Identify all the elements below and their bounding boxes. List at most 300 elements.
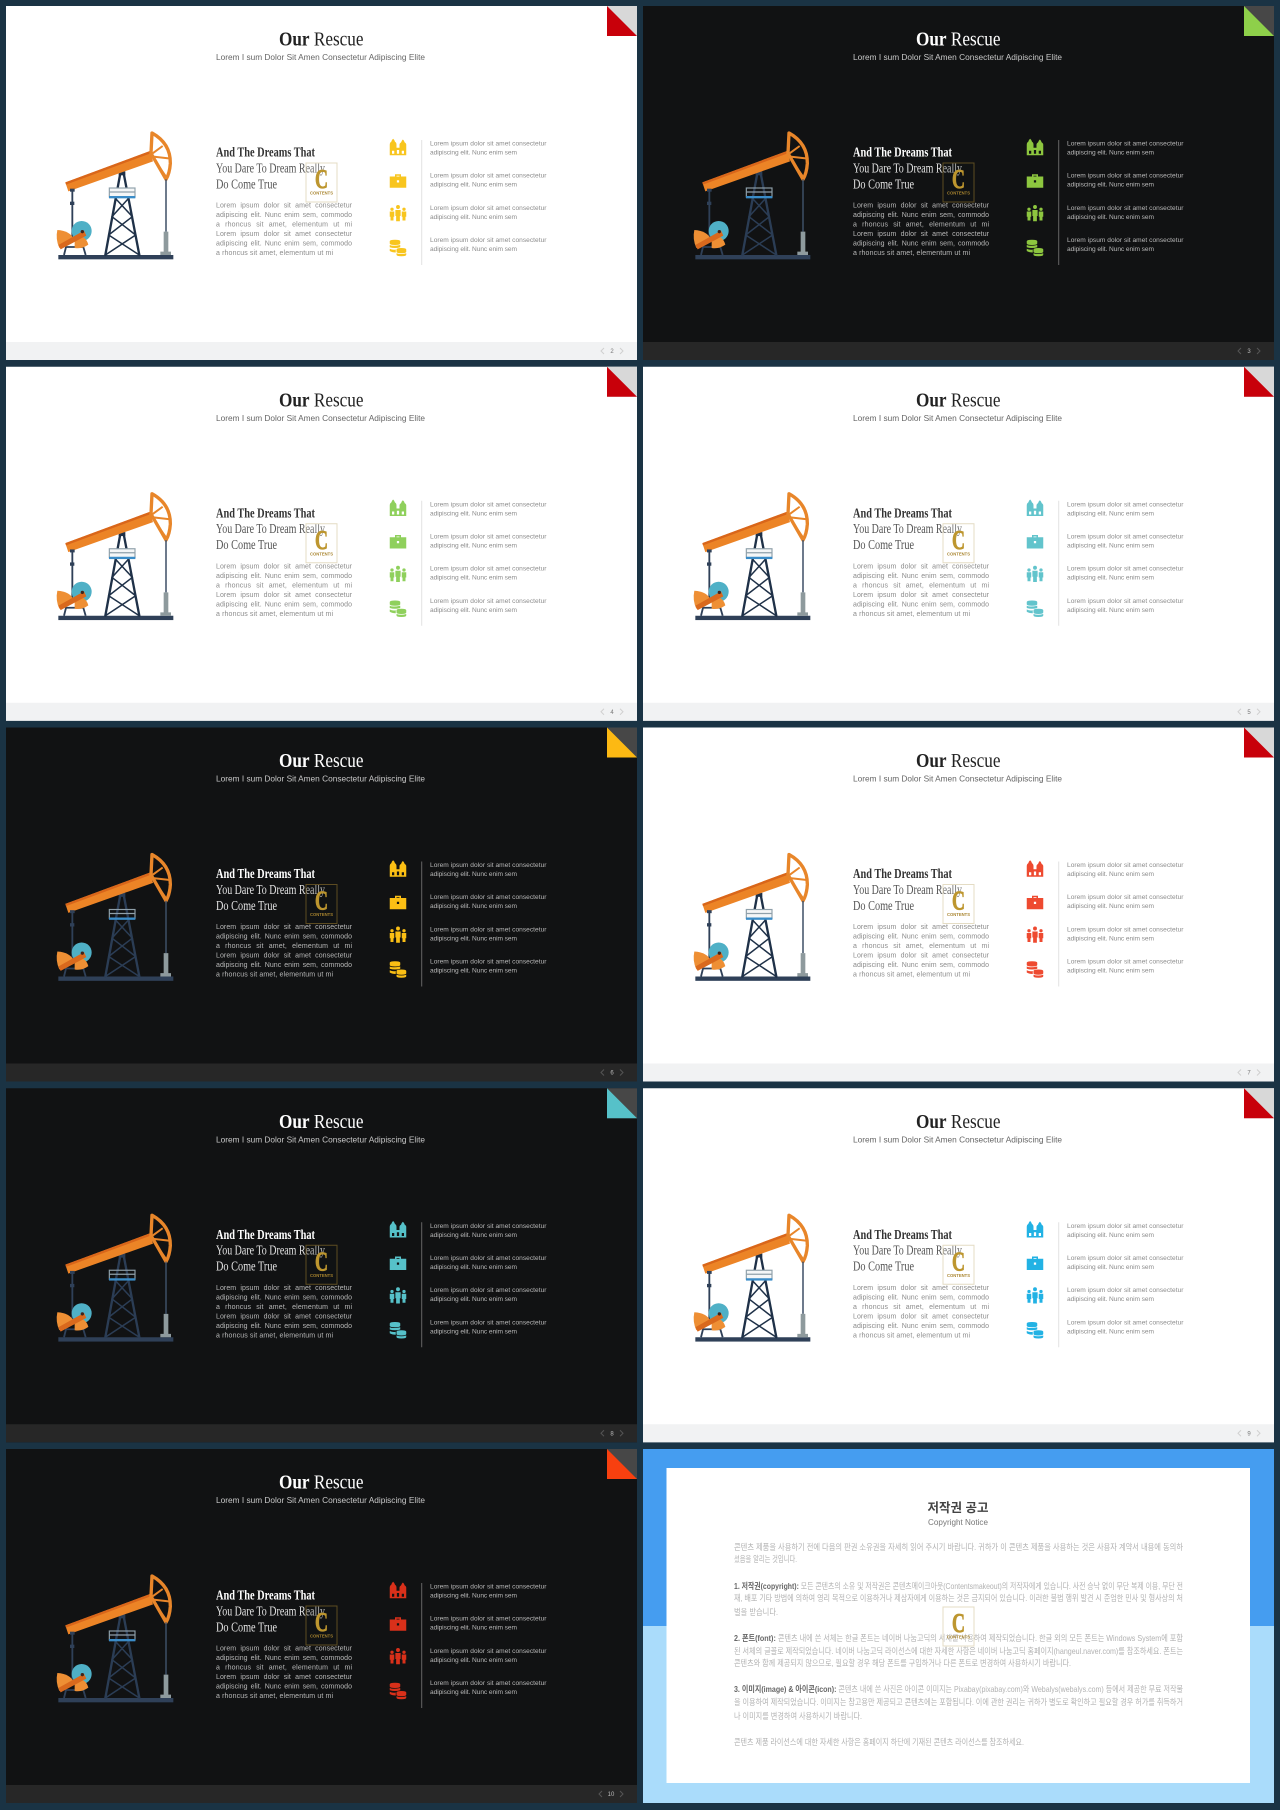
list text: adipiscing elit. Nunc enim sem (430, 1264, 518, 1271)
body paragraph: Lorem ipsum dolor sit amet consectetur (853, 924, 990, 931)
subtitle: Lorem I sum Dolor Sit Amen Consectetur Adipiscing Elite (853, 52, 1062, 62)
list text: adipiscing elit. Nunc enim sem (430, 1657, 518, 1664)
body paragraph: a rhoncus sit amet, elementum ut mi (853, 943, 989, 950)
list text: Lorem ipsum dolor sit amet consectetur (1067, 1319, 1184, 1326)
list text: adipiscing elit. Nunc enim sem (1067, 214, 1154, 221)
heading: You Dare To Dream Really (216, 1604, 325, 1619)
icon: briefcase (390, 896, 406, 909)
list text: Lorem ipsum dolor sit amet consectetur (430, 1616, 547, 1623)
divider (421, 1583, 423, 1708)
section 3: image and icon (734, 1684, 1183, 1721)
watermark (943, 1245, 974, 1284)
section 3: image and icon: 나 이미지를 변경하여 사용하시기 바랍니다. (734, 1711, 862, 1721)
icon: people (1027, 566, 1043, 582)
watermark: CONTENTS (310, 1634, 333, 1638)
watermark: C (315, 164, 328, 194)
icon: coins (1027, 600, 1043, 617)
body paragraph: adipiscing elit. Nunc enim sem, commodo (216, 573, 352, 580)
list text: adipiscing elit. Nunc enim sem (1067, 1264, 1154, 1271)
body paragraph (853, 202, 990, 257)
corner tab (1244, 367, 1274, 397)
icon: oil pump (694, 494, 810, 620)
list text: adipiscing elit. Nunc enim sem (430, 150, 518, 156)
body paragraph: a rhoncus sit amet, elementum ut mi (853, 972, 970, 978)
list text: Lorem ipsum dolor sit amet consectetur (1067, 894, 1184, 901)
list text: adipiscing elit. Nunc enim sem (430, 1689, 518, 1696)
icon: people (1027, 205, 1043, 221)
corner tab (1244, 1088, 1274, 1118)
body paragraph (216, 924, 353, 978)
body paragraph (853, 924, 990, 978)
section 2: font: 2. 폰트(font): 콘텐츠 내에 쓴 서체는 한글 폰트는 네이버 나눔고딕의 서체를 사용하여 제작되었습니다. 한글 외의 모든 폰트는 Windows System에 포함 (734, 1633, 1183, 1643)
list text (1067, 140, 1184, 253)
body paragraph: Lorem ipsum dolor sit amet consectetur (216, 1313, 353, 1320)
section 2: font: 콘텐츠와 함께 제공되지 않으므로, 필요할 경우 해당 폰트를 구입하거나 다른 폰트로 변경하여 사용하시기 바랍니다. (734, 1658, 1071, 1668)
divider (421, 140, 423, 265)
title: Our Rescue (279, 1472, 364, 1494)
watermark: C (315, 1607, 328, 1637)
list text: Lorem ipsum dolor sit amet consectetur (430, 1287, 547, 1294)
background (6, 6, 637, 360)
body paragraph: a rhoncus sit amet, elementum ut mi (216, 222, 352, 228)
list text: adipiscing elit. Nunc enim sem (1067, 1296, 1154, 1303)
watermark: C (315, 525, 328, 555)
icon: briefcase (390, 1617, 406, 1631)
body paragraph: adipiscing elit. Nunc enim sem, commodo (853, 601, 989, 608)
body paragraph: a rhoncus sit amet, elementum ut mi (853, 222, 989, 228)
heading (853, 146, 962, 192)
heading (853, 867, 962, 914)
list text: Lorem ipsum dolor sit amet consectetur (1067, 140, 1184, 148)
slide 7: white with red icons (643, 728, 1274, 1082)
icon: coins (390, 1322, 406, 1338)
body paragraph: Lorem ipsum dolor sit amet consectetur (216, 202, 353, 210)
list text: Lorem ipsum dolor sit amet consectetur (1067, 926, 1184, 933)
section 3: image and icon: 3. 이미지(image) & 아이콘(icon): 콘텐츠 내에 쓴 사진은 아이콘 이미지는 Pixabay(pixabay.com)와 Webalys(webalys.com) 등에서 제공한 무료 저작물 (734, 1684, 1183, 1694)
heading: You Dare To Dream Really (853, 1244, 962, 1259)
heading: You Dare To Dream Really (216, 522, 325, 537)
icon: oil pump (57, 494, 173, 620)
pager: 8 (610, 1431, 614, 1437)
body paragraph: Lorem ipsum dolor sit amet consectetur (853, 231, 990, 238)
icon: oil pump (57, 854, 173, 981)
watermark: CONTENTS (947, 1273, 970, 1278)
list text: adipiscing elit. Nunc enim sem (1067, 182, 1154, 189)
slide 8: dark with teal icons (6, 1088, 637, 1442)
panel: copyright notice (643, 1449, 1274, 1803)
watermark: CONTENTS (947, 551, 970, 556)
list text (1067, 501, 1184, 614)
section 2: font (734, 1633, 1183, 1668)
body paragraph: adipiscing elit. Nunc enim sem, commodo (216, 1294, 352, 1301)
heading (216, 506, 325, 553)
list text: Lorem ipsum dolor sit amet consectetur (430, 1584, 547, 1590)
list text: Lorem ipsum dolor sit amet consectetur (430, 894, 547, 901)
footer bar (6, 1785, 637, 1803)
divider (421, 1222, 423, 1347)
subtitle: Lorem I sum Dolor Sit Amen Consectetur Adipiscing Elite (853, 774, 1062, 784)
subtitle: Lorem I sum Dolor Sit Amen Consectetur Adipiscing Elite (853, 1134, 1062, 1144)
icon: factory (1027, 860, 1043, 877)
body paragraph: Lorem ipsum dolor sit amet consectetur (216, 592, 353, 599)
pager: 7 (1247, 1070, 1251, 1076)
title: Our Rescue (279, 1111, 364, 1133)
icon: briefcase (390, 535, 406, 548)
body paragraph: adipiscing elit. Nunc enim sem, commodo (853, 934, 989, 940)
heading: Do Come True (216, 1620, 277, 1635)
watermark (306, 1606, 337, 1645)
heading: Do Come True (853, 538, 914, 553)
list text: adipiscing elit. Nunc enim sem (430, 182, 518, 189)
list text: Lorem ipsum dolor sit amet consectetur (430, 1223, 547, 1230)
footer bar (6, 342, 637, 360)
subtitle: Lorem I sum Dolor Sit Amen Consectetur Adipiscing Elite (216, 413, 425, 423)
heading: Do Come True (216, 538, 277, 553)
title: Our Rescue (279, 750, 364, 772)
heading: Do Come True (853, 1260, 914, 1275)
pager: 3 (1247, 349, 1251, 355)
body paragraph (216, 1646, 353, 1700)
watermark: CONTENTS (310, 190, 333, 196)
pager (1238, 709, 1260, 716)
background (6, 1449, 637, 1803)
icon: coins (1027, 1322, 1043, 1338)
watermark: C (952, 886, 965, 916)
title: Our Rescue (916, 750, 1000, 772)
list text: adipiscing elit. Nunc enim sem (430, 1625, 518, 1632)
list text: adipiscing elit. Nunc enim sem (430, 935, 518, 942)
corner tab (607, 6, 637, 36)
list text: adipiscing elit. Nunc enim sem (430, 1592, 518, 1600)
body paragraph (216, 563, 353, 618)
section 3: image and icon: 을 이용하여 제작되었습니다. 이미지는 참고용만 제공되고 콘텐츠에는 포함됩니다. 이에 관한 권리는 귀하가 별도로 확인하고 필요할 경우 허가를 취득하거 (734, 1697, 1183, 1707)
list text (430, 1223, 547, 1335)
list text: Lorem ipsum dolor sit amet consectetur (430, 862, 547, 869)
icon: factory (1027, 1221, 1043, 1238)
watermark (943, 163, 974, 202)
body paragraph: Lorem ipsum dolor sit amet consectetur (216, 231, 353, 238)
list text (430, 862, 547, 975)
title: Our Rescue (916, 29, 1000, 51)
subtitle: Lorem I sum Dolor Sit Amen Consectetur Adipiscing Elite (216, 52, 425, 62)
heading: And The Dreams That (853, 867, 952, 882)
footer bar (643, 1064, 1274, 1082)
heading (853, 506, 962, 553)
background (643, 1088, 1274, 1442)
heading (853, 1228, 962, 1275)
footer bar (6, 703, 637, 721)
list text: Lorem ipsum dolor sit amet consectetur (1067, 1287, 1184, 1294)
heading (216, 867, 325, 914)
pager (1238, 1430, 1260, 1437)
list text: adipiscing elit. Nunc enim sem (1067, 150, 1154, 156)
body paragraph (853, 563, 990, 618)
body paragraph: adipiscing elit. Nunc enim sem, commodo (216, 962, 352, 969)
list text: adipiscing elit. Nunc enim sem (430, 542, 518, 549)
background (643, 728, 1274, 1082)
list text: adipiscing elit. Nunc enim sem (430, 1296, 518, 1303)
subtitle: Lorem I sum Dolor Sit Amen Consectetur Adipiscing Elite (853, 413, 1062, 423)
watermark: C (315, 1246, 328, 1276)
icon: people (1027, 1287, 1043, 1304)
body paragraph: Lorem ipsum dolor sit amet consectetur (853, 1313, 990, 1320)
body paragraph: a rhoncus sit amet, elementum ut mi (853, 1304, 989, 1311)
body paragraph: a rhoncus sit amet, elementum ut mi (216, 943, 352, 950)
intro paragraph (734, 1542, 1183, 1564)
footer bar (6, 1424, 637, 1442)
section 1: copyright (734, 1581, 1183, 1617)
list text: Lorem ipsum dolor sit amet consectetur (430, 1319, 547, 1326)
body paragraph: adipiscing elit. Nunc enim sem, commodo (853, 1294, 989, 1301)
body paragraph: a rhoncus sit amet, elementum ut mi (216, 250, 333, 257)
body paragraph: adipiscing elit. Nunc enim sem, commodo (216, 934, 352, 940)
corner tab (607, 367, 637, 397)
icon: factory (390, 1582, 406, 1598)
icon: coins (390, 961, 406, 978)
list text: adipiscing elit. Nunc enim sem (430, 1232, 518, 1239)
list text: Lorem ipsum dolor sit amet consectetur (430, 501, 547, 508)
title: Our Rescue (916, 389, 1000, 411)
watermark (306, 524, 337, 563)
list text: Lorem ipsum dolor sit amet consectetur (1067, 205, 1184, 212)
slide 4: white with light green icons (6, 367, 637, 721)
icon: oil pump (694, 1215, 810, 1342)
pager: 10 (608, 1792, 615, 1798)
list text: Lorem ipsum dolor sit amet consectetur (430, 566, 547, 573)
body paragraph: Lorem ipsum dolor sit amet consectetur (853, 592, 990, 599)
list text: adipiscing elit. Nunc enim sem (1067, 1232, 1154, 1239)
background (6, 728, 637, 1082)
list text: Lorem ipsum dolor sit amet consectetur (430, 1255, 547, 1262)
icon: coins (390, 240, 406, 256)
heading: And The Dreams That (853, 146, 952, 161)
body paragraph: a rhoncus sit amet, elementum ut mi (853, 1332, 970, 1339)
section 1: copyright: 1. 저작권(copyright): 모든 콘텐츠의 소유 및 저작권은 콘텐츠메이크아웃(Contentsmakeout)의 저작자에게 있습니다. 사전 승낙 없이 무단 복제 이용, 무단 전 (734, 1581, 1183, 1591)
heading: You Dare To Dream Really (853, 161, 962, 176)
title: Our Rescue (916, 1111, 1000, 1133)
body paragraph: Lorem ipsum dolor sit amet consectetur (853, 1285, 990, 1292)
watermark: CONTENTS (310, 1273, 333, 1278)
list text: Lorem ipsum dolor sit amet consectetur (430, 140, 547, 148)
body paragraph: adipiscing elit. Nunc enim sem, commodo (216, 1323, 352, 1330)
list text: Lorem ipsum dolor sit amet consectetur (430, 1680, 547, 1687)
list text: adipiscing elit. Nunc enim sem (1067, 968, 1154, 975)
list text: Lorem ipsum dolor sit amet consectetur (1067, 862, 1184, 869)
body paragraph: Lorem ipsum dolor sit amet consectetur (216, 563, 353, 570)
body paragraph: a rhoncus sit amet, elementum ut mi (853, 582, 989, 589)
corner tab (607, 1088, 637, 1118)
body paragraph: Lorem ipsum dolor sit amet consectetur (216, 924, 353, 931)
pager (601, 1070, 623, 1076)
pager: 9 (1247, 1431, 1251, 1437)
heading: You Dare To Dream Really (853, 883, 962, 898)
icon: factory (1027, 139, 1043, 155)
watermark: C (315, 886, 328, 916)
icon: oil pump (57, 1576, 173, 1702)
icon: briefcase (1027, 1256, 1043, 1270)
icon: factory (390, 1221, 406, 1238)
list text: Lorem ipsum dolor sit amet consectetur (1067, 237, 1184, 244)
corner tab (607, 728, 637, 758)
list text: adipiscing elit. Nunc enim sem (430, 246, 518, 253)
watermark: CONTENTS (947, 1634, 970, 1640)
body paragraph: Lorem ipsum dolor sit amet consectetur (216, 1674, 353, 1681)
divider (1058, 862, 1060, 986)
section 1: copyright: 재, 배포 기타 방법에 의하여 영리 목적으로 이용하거나 제삼자에게 이용하는 것은 금지되어 있습니다. 이러한 불법 행위 발견 시 준엄한 민사 및 형사상의 처 (734, 1593, 1183, 1603)
heading: And The Dreams That (853, 1228, 952, 1243)
heading (216, 146, 325, 192)
subtitle: Lorem I sum Dolor Sit Amen Consectetur Adipiscing Elite (216, 774, 425, 784)
icon: people (390, 1287, 406, 1304)
list text: adipiscing elit. Nunc enim sem (1067, 575, 1154, 582)
list text (1067, 862, 1184, 975)
list text (430, 1584, 547, 1696)
background (643, 367, 1274, 721)
body paragraph: a rhoncus sit amet, elementum ut mi (853, 611, 970, 618)
corner tab (1244, 728, 1274, 758)
light blue lower background (643, 1626, 1274, 1803)
pager (1238, 348, 1260, 355)
list text: adipiscing elit. Nunc enim sem (1067, 510, 1154, 517)
icon: briefcase (1027, 174, 1043, 188)
body paragraph: adipiscing elit. Nunc enim sem, commodo (853, 240, 989, 248)
background (6, 367, 637, 721)
blue upper background (643, 1449, 1274, 1626)
list text: adipiscing elit. Nunc enim sem (1067, 607, 1154, 614)
heading: And The Dreams That (216, 146, 315, 161)
watermark: C (952, 525, 965, 555)
footer bar (6, 1064, 637, 1082)
watermark: C (952, 1246, 965, 1276)
heading: Do Come True (216, 1260, 277, 1275)
pager (1238, 1070, 1260, 1076)
pager: 4 (610, 710, 614, 716)
watermark: CONTENTS (947, 190, 970, 196)
divider (421, 501, 423, 626)
body paragraph: a rhoncus sit amet, elementum ut mi (216, 1332, 333, 1339)
body paragraph: a rhoncus sit amet, elementum ut mi (216, 611, 333, 618)
icon: oil pump (57, 1215, 173, 1342)
slide 9: white with blue icons (643, 1088, 1274, 1442)
pager (601, 1430, 623, 1437)
list text: adipiscing elit. Nunc enim sem (430, 968, 518, 975)
body paragraph: Lorem ipsum dolor sit amet consectetur (216, 1285, 353, 1292)
icon: briefcase (1027, 535, 1043, 548)
watermark (943, 524, 974, 563)
body paragraph: a rhoncus sit amet, elementum ut mi (216, 1664, 352, 1672)
heading (216, 1589, 325, 1635)
footer bar (643, 1424, 1274, 1442)
icon: factory (390, 139, 406, 155)
heading: And The Dreams That (853, 506, 952, 521)
body paragraph: adipiscing elit. Nunc enim sem, commodo (853, 1323, 989, 1330)
body paragraph (853, 1285, 990, 1339)
icon: coins (1027, 240, 1043, 256)
list text (1067, 1223, 1184, 1335)
slide 2: white with yellow icons (6, 6, 637, 360)
body paragraph: adipiscing elit. Nunc enim sem, commodo (853, 212, 989, 219)
heading: And The Dreams That (216, 1228, 315, 1243)
divider (421, 862, 423, 986)
divider (1058, 140, 1060, 265)
heading: You Dare To Dream Really (853, 522, 962, 537)
watermark (306, 884, 337, 924)
title: Our Rescue (279, 389, 364, 411)
section 2: font: 된 서체의 글꼴로 제작되었습니다. 네이버 나눔고딕 라이선스에 대한 자세한 사항은 네이버 나눔고딕 홈페이지(hangeul.naver.com)를 참조하세요. 폰트는 (734, 1646, 1183, 1656)
background (643, 6, 1274, 360)
body paragraph: adipiscing elit. Nunc enim sem, commodo (853, 573, 989, 580)
heading: You Dare To Dream Really (216, 1244, 325, 1259)
list text: Lorem ipsum dolor sit amet consectetur (430, 237, 547, 244)
icon: factory (390, 500, 406, 516)
list text: Lorem ipsum dolor sit amet consectetur (1067, 501, 1184, 508)
list text: Lorem ipsum dolor sit amet consectetur (430, 205, 547, 212)
icon: briefcase (390, 174, 406, 188)
heading: Do Come True (216, 899, 277, 914)
body paragraph: Lorem ipsum dolor sit amet consectetur (853, 202, 990, 210)
body paragraph: Lorem ipsum dolor sit amet consectetur (853, 563, 990, 570)
list text: adipiscing elit. Nunc enim sem (1067, 903, 1154, 910)
corner tab (607, 1449, 637, 1479)
list text (430, 501, 547, 614)
list text: adipiscing elit. Nunc enim sem (430, 903, 518, 910)
body paragraph: adipiscing elit. Nunc enim sem, commodo (216, 240, 352, 248)
watermark (306, 1245, 337, 1284)
body paragraph: a rhoncus sit amet, elementum ut mi (216, 972, 333, 978)
heading: And The Dreams That (216, 867, 315, 882)
white notice card (666, 1468, 1250, 1783)
list text: Lorem ipsum dolor sit amet consectetur (1067, 1223, 1184, 1230)
list text: adipiscing elit. Nunc enim sem (1067, 1328, 1154, 1335)
list text: Lorem ipsum dolor sit amet consectetur (1067, 1255, 1184, 1262)
heading: And The Dreams That (216, 1589, 315, 1604)
heading: Do Come True (853, 177, 914, 192)
list text: Lorem ipsum dolor sit amet consectetur (1067, 533, 1184, 540)
watermark (943, 884, 974, 924)
icon: coins (390, 600, 406, 617)
list text: Lorem ipsum dolor sit amet consectetur (430, 533, 547, 540)
body paragraph: Lorem ipsum dolor sit amet consectetur (853, 952, 990, 960)
watermark: C (952, 1608, 965, 1638)
pager: 6 (610, 1070, 614, 1076)
body paragraph (216, 202, 353, 257)
background (6, 1088, 637, 1442)
list text: adipiscing elit. Nunc enim sem (430, 871, 518, 878)
icon: factory (1027, 500, 1043, 516)
watermark: CONTENTS (310, 551, 333, 556)
list text: adipiscing elit. Nunc enim sem (430, 575, 518, 582)
heading: And The Dreams That (216, 506, 315, 521)
divider (1058, 1222, 1060, 1347)
body paragraph (216, 1285, 353, 1339)
body paragraph: adipiscing elit. Nunc enim sem, commodo (853, 962, 989, 969)
list text (430, 140, 547, 253)
title: Our Rescue (279, 29, 364, 51)
icon: briefcase (390, 1256, 406, 1270)
notice title: 저작권 공고 (928, 1500, 988, 1515)
list text: adipiscing elit. Nunc enim sem (1067, 246, 1154, 253)
body paragraph: a rhoncus sit amet, elementum ut mi (853, 250, 970, 257)
list text: adipiscing elit. Nunc enim sem (430, 510, 518, 517)
section 1: copyright: 벌을 받습니다. (734, 1607, 778, 1617)
body paragraph: adipiscing elit. Nunc enim sem, commodo (216, 1684, 352, 1690)
body paragraph: Lorem ipsum dolor sit amet consectetur (216, 952, 353, 960)
list text: Lorem ipsum dolor sit amet consectetur (1067, 566, 1184, 573)
icon: factory (390, 860, 406, 877)
list text: adipiscing elit. Nunc enim sem (430, 214, 518, 221)
heading: You Dare To Dream Really (216, 883, 325, 898)
list text: adipiscing elit. Nunc enim sem (430, 607, 518, 614)
